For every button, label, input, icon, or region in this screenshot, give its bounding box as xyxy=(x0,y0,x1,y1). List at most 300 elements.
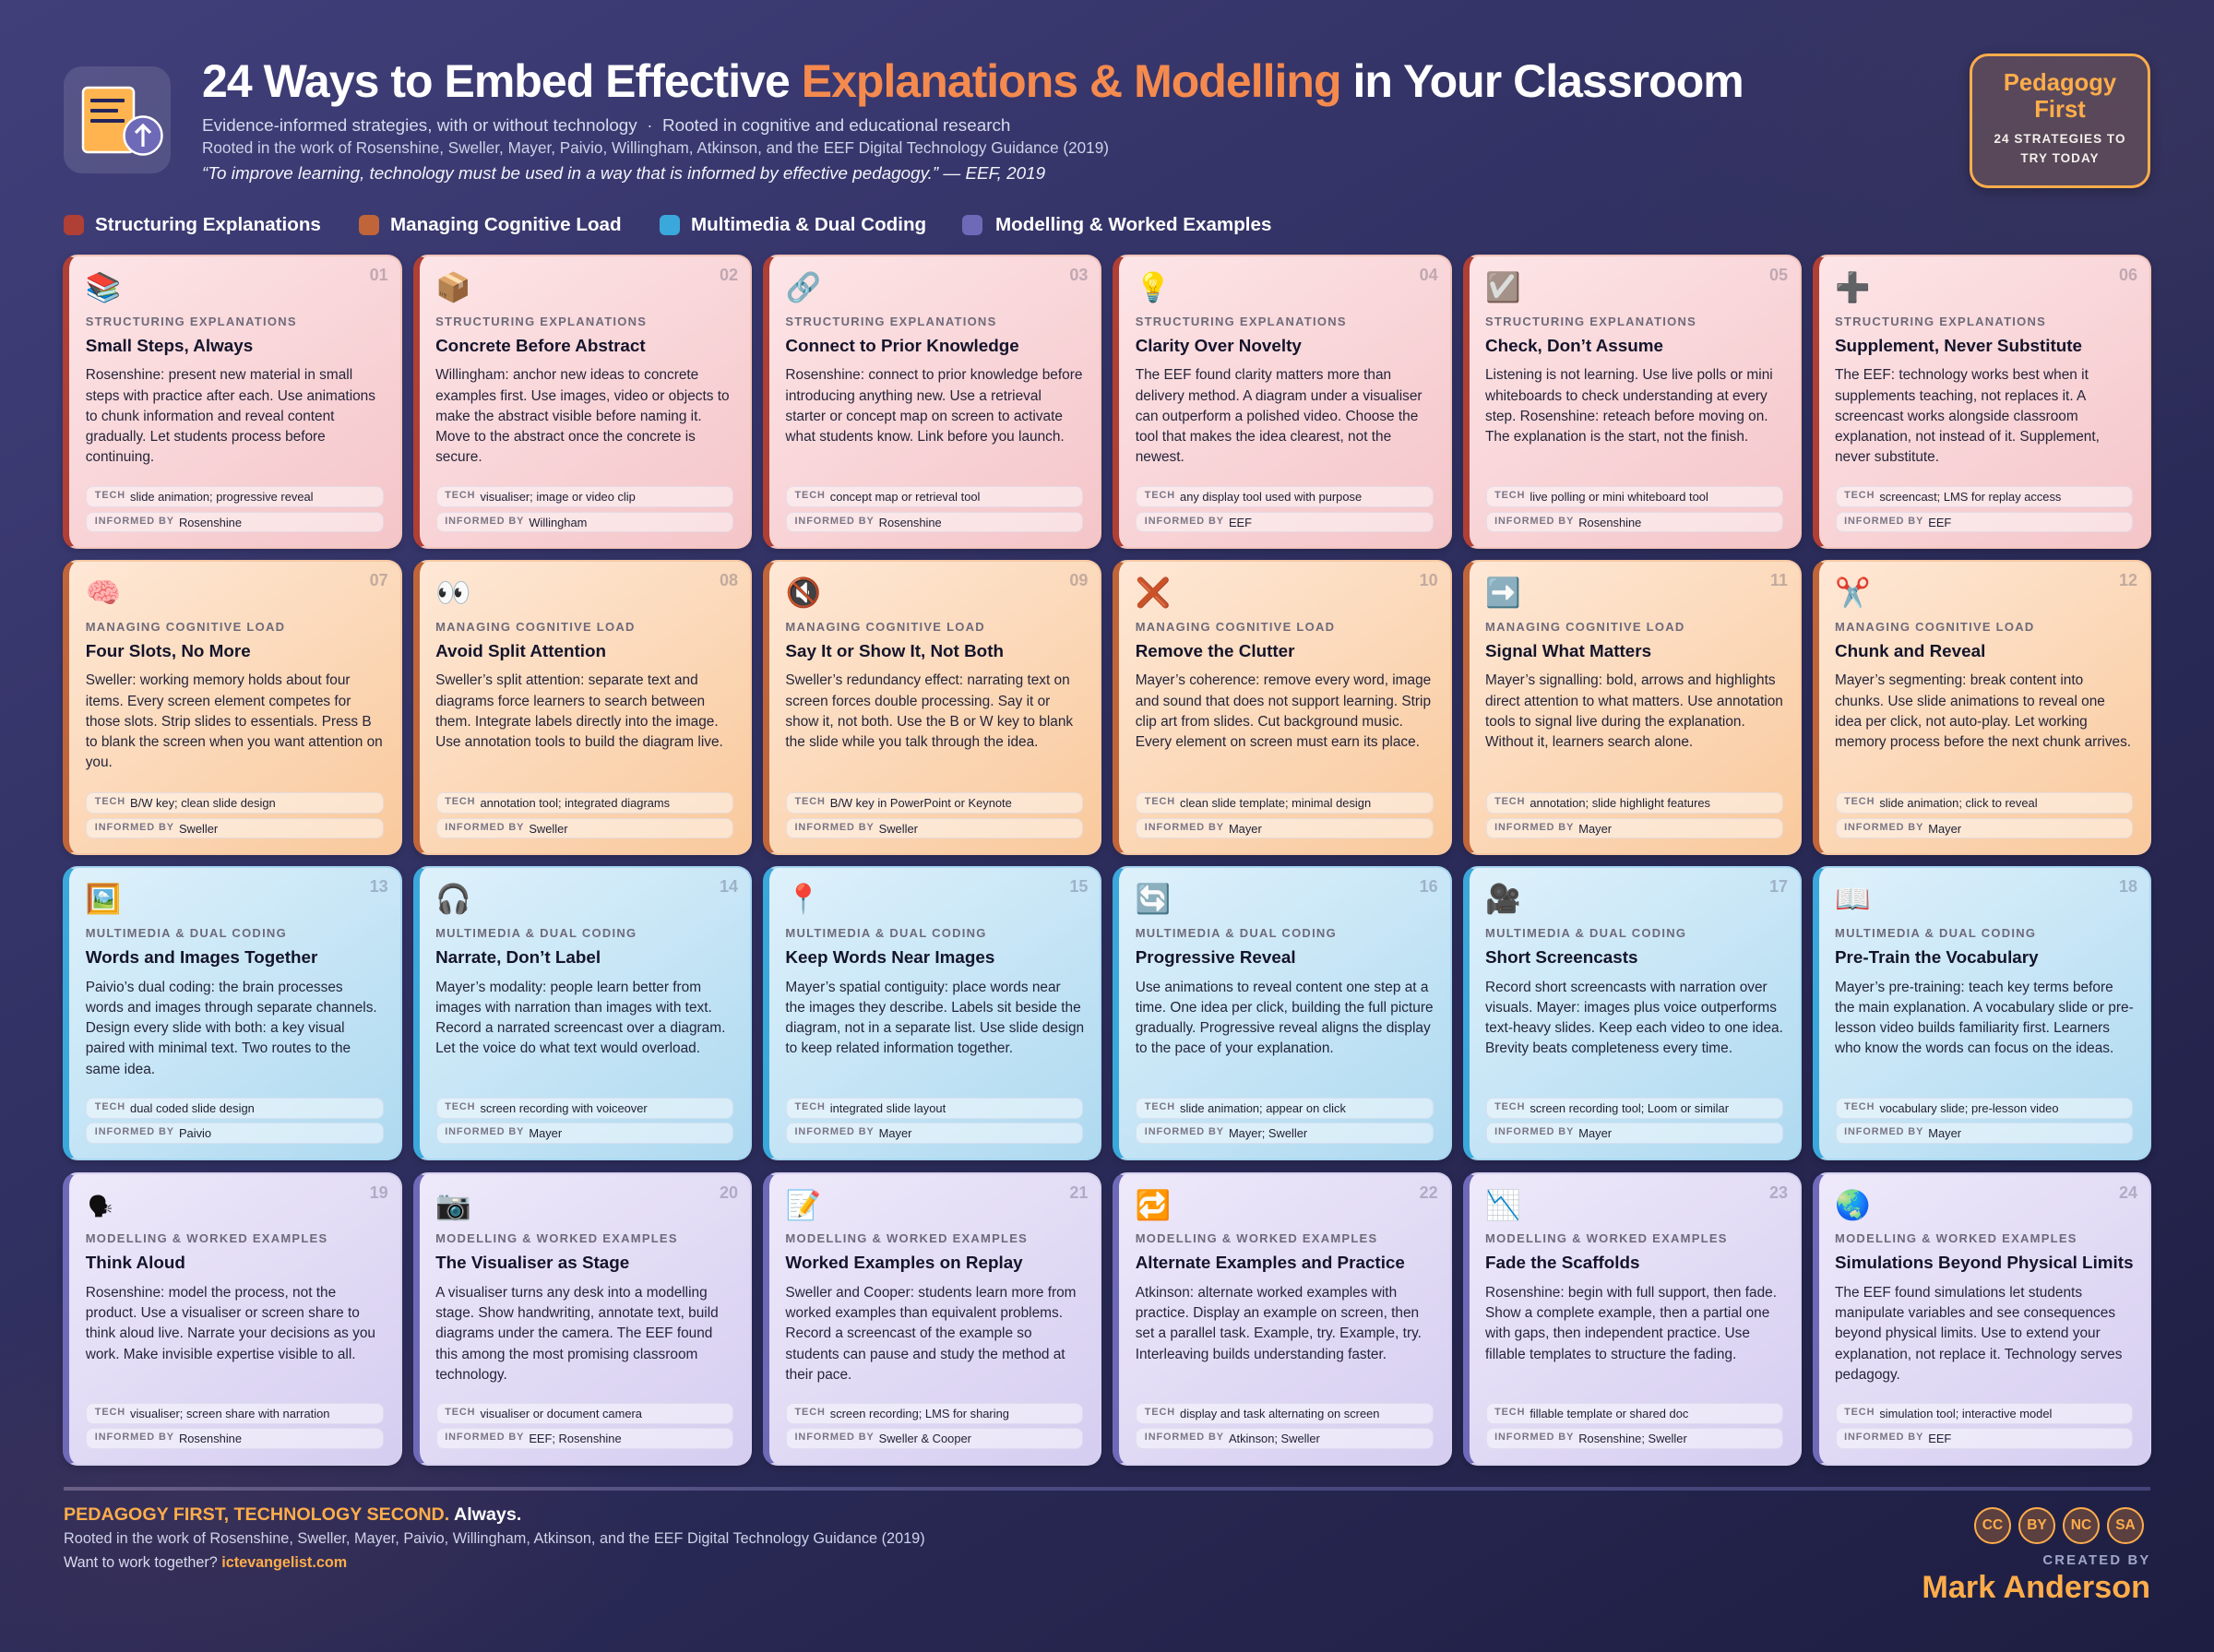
card 17: Mayer xyxy=(1578,1126,1612,1140)
card 11: 11 xyxy=(1770,571,1788,589)
card 20: visualiser or document camera xyxy=(480,1407,642,1420)
card 02: Move to the abstract once the concrete is xyxy=(435,429,696,445)
card 18: MULTIMEDIA & DUAL CODING xyxy=(1835,926,2036,940)
card 09 xyxy=(763,560,1101,855)
card 06: Supplement, Never Substitute xyxy=(1835,336,2082,354)
card 21: students can pause and study the method at xyxy=(785,1347,1065,1362)
card 13: 13 xyxy=(370,877,388,896)
card 23: fillable templates to structure the fading. xyxy=(1485,1347,1736,1362)
card 04 xyxy=(1113,255,1452,549)
licence badges: BY xyxy=(2027,1517,2047,1533)
card 10 xyxy=(1113,560,1452,855)
card 06: ➕ xyxy=(1835,270,1871,304)
card 19: think aloud live. Narrate your decisions as you xyxy=(86,1325,375,1341)
card 14: Let the voice do what text would overload. xyxy=(435,1040,700,1056)
card 22: INFORMED BY xyxy=(1145,1432,1224,1443)
card 04: tool that makes the idea clearest, not the xyxy=(1136,429,1391,445)
card 04: can outperform a polished video. Choose the xyxy=(1136,409,1418,424)
card 09: TECH xyxy=(795,796,826,807)
card 12: TECH xyxy=(1844,796,1875,807)
card 20: TECH xyxy=(445,1407,475,1418)
card 13: Paivio’s dual coding: the brain processes xyxy=(86,980,343,995)
header icon xyxy=(64,66,171,173)
card 09: screen forces double processing. Say it or xyxy=(785,694,1050,709)
card 07 xyxy=(63,560,402,855)
card 22 xyxy=(1113,1171,1452,1465)
card 12: Mayer’s segmenting: break content into xyxy=(1835,672,2083,688)
card 20 xyxy=(413,1171,752,1465)
card 12: idea per click, not auto-play. Let working xyxy=(1835,714,2088,730)
card 24: 24 xyxy=(2119,1183,2137,1201)
card 01: 01 xyxy=(370,266,388,284)
card 12 xyxy=(1813,560,2151,855)
card 23: INFORMED BY xyxy=(1494,1432,1574,1443)
card 02: visualiser; image or video clip xyxy=(480,490,636,504)
card 18: 📖 xyxy=(1835,882,1871,916)
card 06: 06 xyxy=(2119,266,2137,284)
card 01: Small Steps, Always xyxy=(86,336,253,354)
card 08: 08 xyxy=(720,571,738,589)
card 17: Short Screencasts xyxy=(1485,947,1637,967)
card 07: 07 xyxy=(370,571,388,589)
card 16: INFORMED BY xyxy=(1145,1126,1224,1137)
card 07: TECH xyxy=(95,796,125,807)
card 02: Concrete Before Abstract xyxy=(435,336,646,354)
card 15: to keep related information together. xyxy=(785,1040,1013,1056)
card 12: Chunk and Reveal xyxy=(1835,640,1985,660)
card 20: 📷 xyxy=(435,1188,471,1221)
card 18: TECH xyxy=(1844,1101,1875,1112)
card 01: STRUCTURING EXPLANATIONS xyxy=(86,314,297,328)
card 06: The EEF: technology works best when it xyxy=(1835,367,2089,383)
card 22: Interleaving builds understanding faster. xyxy=(1136,1347,1387,1362)
card 23: fillable template or shared doc xyxy=(1530,1407,1688,1420)
card 19: 19 xyxy=(370,1183,388,1201)
card 21: Record a screencast of the example so xyxy=(785,1325,1032,1341)
card 05: live polling or mini whiteboard tool xyxy=(1530,490,1708,504)
card 02: STRUCTURING EXPLANATIONS xyxy=(435,314,647,328)
creator credit: CREATED BY xyxy=(2042,1553,2151,1568)
card 08: INFORMED BY xyxy=(445,822,524,833)
card 20: stage. Show handwriting, annotate text, build xyxy=(435,1305,719,1321)
card 01: steps with practice after each. Use animations xyxy=(86,388,375,404)
card 21: Sweller and Cooper: students learn more from xyxy=(785,1285,1077,1301)
badge: TRY TODAY xyxy=(2020,151,2100,164)
card 21: Worked Examples on Replay xyxy=(785,1253,1023,1272)
card 02: examples first. Use images, video or objects to xyxy=(435,388,730,404)
card 04: 💡 xyxy=(1136,270,1171,304)
card 17: 🎥 xyxy=(1485,882,1521,916)
card 08: Use annotation tools to build the diagram live. xyxy=(435,734,723,750)
quote: “To improve learning, technology must be used in a way that is informed by effective pedagogy.” — EEF, 2019 xyxy=(202,162,1045,183)
card 07: INFORMED BY xyxy=(95,822,174,833)
card 12: MANAGING COGNITIVE LOAD xyxy=(1835,620,2035,633)
card 07: Four Slots, No More xyxy=(86,640,251,660)
card 09: Sweller’s redundancy effect: narrating text on xyxy=(785,672,1070,688)
card 15: Keep Words Near Images xyxy=(785,947,994,967)
card 03: introducing anything new. Use a retrieval xyxy=(785,388,1042,404)
card 14: TECH xyxy=(445,1101,475,1112)
card 23: 📉 xyxy=(1485,1188,1521,1221)
card 04: delivery method. A diagram under a visualiser xyxy=(1136,388,1422,404)
card 10: clip art from slides. Cut background music. xyxy=(1136,714,1403,730)
card 19: INFORMED BY xyxy=(95,1432,174,1443)
card 24: 🌏 xyxy=(1835,1188,1871,1221)
card 11: Mayer xyxy=(1578,822,1612,836)
card 18: Mayer’s pre-training: teach key terms before xyxy=(1835,980,2113,995)
card 20: INFORMED BY xyxy=(445,1432,524,1443)
card 13: INFORMED BY xyxy=(95,1126,174,1137)
card 07: MANAGING COGNITIVE LOAD xyxy=(86,620,285,633)
card 03: concept map or retrieval tool xyxy=(830,490,980,504)
card 11: Mayer’s signalling: bold, arrows and highlights xyxy=(1485,672,1776,688)
card 02 xyxy=(413,255,752,549)
card 01: Rosenshine: present new material in small xyxy=(86,367,352,383)
card 13: 🖼️ xyxy=(86,882,121,916)
card 15: Mayer xyxy=(879,1126,911,1140)
card 24: beyond physical limits. Use to extend your xyxy=(1835,1325,2101,1341)
card 07: Sweller: working memory holds about four xyxy=(86,672,351,688)
card 21: 📝 xyxy=(786,1188,821,1221)
card 01: slide animation; progressive reveal xyxy=(130,490,314,504)
card 16: to the pace of your explanation. xyxy=(1136,1040,1334,1056)
card 02: 📦 xyxy=(435,270,471,304)
card 09: show it, not both. Use the B or W key to blank xyxy=(785,714,1073,730)
card 08: Sweller xyxy=(529,822,568,836)
card 23: Show a complete example, then a partial one xyxy=(1485,1305,1769,1321)
badge xyxy=(1970,53,2150,188)
card 09: the slide while you talk through the idea. xyxy=(785,734,1038,750)
card 05: step. Rosenshine: reteach before moving on. xyxy=(1485,409,1768,424)
card 16: 16 xyxy=(1420,877,1438,896)
card 20: MODELLING & WORKED EXAMPLES xyxy=(435,1231,678,1245)
card 01 xyxy=(63,255,402,549)
card 01: gradually. Let students process before xyxy=(86,429,326,445)
card 01: TECH xyxy=(95,490,125,501)
subtitle: Evidence-informed strategies, with or without technology · Rooted in cognitive and educational research xyxy=(202,115,1010,135)
card 21 xyxy=(763,1171,1101,1465)
card 12: slide animation; click to reveal xyxy=(1879,796,2038,810)
card 24 xyxy=(1813,1171,2151,1465)
card 03: STRUCTURING EXPLANATIONS xyxy=(785,314,996,328)
card 01: Rosenshine xyxy=(179,516,242,529)
card 23: 23 xyxy=(1769,1183,1788,1201)
card 16: 🔄 xyxy=(1136,882,1171,916)
card 05: INFORMED BY xyxy=(1494,516,1574,527)
card 20: diagrams under the camera. The EEF found xyxy=(435,1325,712,1341)
card 08: them. Integrate labels directly into the image. xyxy=(435,714,719,730)
card 05: Check, Don’t Assume xyxy=(1485,336,1663,354)
card 19: work. Make invisible expertise visible to all. xyxy=(86,1347,356,1362)
card 03: 03 xyxy=(1069,266,1088,284)
licence badges xyxy=(1974,1507,2144,1544)
card 18: Pre-Train the Vocabulary xyxy=(1835,947,2039,967)
card 11: annotation; slide highlight features xyxy=(1530,796,1710,810)
card 22: Alternate Examples and Practice xyxy=(1136,1253,1405,1272)
card 06: supplements teaching, not replaces it. A xyxy=(1835,388,2086,404)
card 15 xyxy=(763,866,1101,1160)
footer text: Rooted in the work of Rosenshine, Sweller, Mayer, Paivio, Willingham, Atkinson, and the EEF Digital Technology Guidance (2019) xyxy=(64,1529,925,1546)
card 15: Mayer’s spatial contiguity: place words near xyxy=(785,980,1061,995)
card 22: display and task alternating on screen xyxy=(1180,1407,1379,1420)
card 11: MANAGING COGNITIVE LOAD xyxy=(1485,620,1685,633)
legend: Modelling & Worked Examples xyxy=(995,214,1271,235)
card 13: paired with minimal text. Two routes to the xyxy=(86,1040,351,1056)
footer text: PEDAGOGY FIRST, TECHNOLOGY SECOND. Always. xyxy=(64,1504,521,1525)
card 21: 21 xyxy=(1069,1183,1088,1201)
card 23: with gaps, then independent practice. Use xyxy=(1485,1325,1750,1341)
card 07: 🧠 xyxy=(86,576,121,610)
card 23: Rosenshine: begin with full support, then fade. xyxy=(1485,1285,1777,1301)
card 19: Think Aloud xyxy=(86,1253,185,1272)
card 11: direct attention to what matters. Use annotation xyxy=(1485,694,1783,709)
card 20: technology. xyxy=(435,1367,507,1383)
card 10: Mayer xyxy=(1229,822,1262,836)
card 05: TECH xyxy=(1494,490,1525,501)
card 13: Words and Images Together xyxy=(86,947,317,967)
card 06: INFORMED BY xyxy=(1844,516,1923,527)
card 08: diagrams force learners to search between xyxy=(435,694,705,709)
card 21: INFORMED BY xyxy=(795,1432,875,1443)
card 05: STRUCTURING EXPLANATIONS xyxy=(1485,314,1696,328)
card 06: explanation, not instead of it. Supplement, xyxy=(1835,429,2100,445)
card 22: Atkinson: alternate worked examples with xyxy=(1136,1285,1397,1301)
card 22: MODELLING & WORKED EXAMPLES xyxy=(1136,1231,1377,1245)
card 23: Rosenshine; Sweller xyxy=(1578,1432,1687,1445)
card 18: Mayer xyxy=(1928,1126,1961,1140)
card 22: 22 xyxy=(1420,1183,1438,1201)
card 02: 02 xyxy=(720,266,738,284)
card 15: MULTIMEDIA & DUAL CODING xyxy=(785,926,987,940)
card 21: Sweller & Cooper xyxy=(879,1432,971,1445)
card 10: Remove the Clutter xyxy=(1136,640,1294,660)
card 09: 09 xyxy=(1069,571,1088,589)
card 04: The EEF found clarity matters more than xyxy=(1136,367,1391,383)
card 10: INFORMED BY xyxy=(1145,822,1224,833)
card 02: Willingham xyxy=(529,516,587,529)
card 08: 👀 xyxy=(435,576,471,610)
card 14: screen recording with voiceover xyxy=(480,1101,648,1115)
card 21: worked examples than equivalent problems. xyxy=(785,1305,1063,1321)
card 06: never substitute. xyxy=(1835,449,1939,465)
footer text xyxy=(64,1504,925,1570)
card 13 xyxy=(63,866,402,1160)
card 17: Brevity beats completeness every time. xyxy=(1485,1040,1732,1056)
card 24: pedagogy. xyxy=(1835,1367,1900,1383)
card 04: EEF xyxy=(1229,516,1252,529)
card 19: Rosenshine: model the process, not the xyxy=(86,1285,336,1301)
card 16: slide animation; appear on click xyxy=(1180,1101,1346,1115)
card 08: TECH xyxy=(445,796,475,807)
card 06: TECH xyxy=(1844,490,1875,501)
card 12: INFORMED BY xyxy=(1844,822,1923,833)
card 24: explanation, not replace it. Technology serves xyxy=(1835,1347,2122,1362)
card 07: to blank the screen when you want attention on xyxy=(86,734,383,750)
card 03: what students know. Link before you launch. xyxy=(785,429,1065,445)
card 11: Without it, learners search alone. xyxy=(1485,734,1693,750)
card 04: Clarity Over Novelty xyxy=(1136,336,1302,354)
card 20: A visualiser turns any desk into a modelling xyxy=(435,1285,708,1301)
card 06 xyxy=(1813,255,2151,549)
card 18: lesson video builds familiarity first. Learners xyxy=(1835,1020,2110,1036)
card 22: set a parallel task. Example, try. Example, try. xyxy=(1136,1325,1422,1341)
card 17: text-heavy slides. Keep each video to one idea. xyxy=(1485,1020,1783,1036)
card 17: 17 xyxy=(1769,877,1788,896)
title: 24 Ways to Embed Effective Explanations & Modelling in Your Classroom xyxy=(202,55,1744,107)
card 08: annotation tool; integrated diagrams xyxy=(480,796,670,810)
card 05: ☑️ xyxy=(1485,270,1521,304)
card 19: MODELLING & WORKED EXAMPLES xyxy=(86,1231,327,1245)
card 12: memory process before the next chunk arrives. xyxy=(1835,734,2131,750)
legend: Multimedia & Dual Coding xyxy=(691,214,926,235)
card 03 xyxy=(763,255,1101,549)
card 22: 🔁 xyxy=(1136,1188,1171,1221)
card 09: B/W key in PowerPoint or Keynote xyxy=(830,796,1012,810)
card 13: TECH xyxy=(95,1101,125,1112)
card 07: B/W key; clean slide design xyxy=(130,796,276,810)
card 23: TECH xyxy=(1494,1407,1525,1418)
card 03: TECH xyxy=(795,490,826,501)
card 03: Connect to Prior Knowledge xyxy=(785,336,1019,354)
card 19 xyxy=(63,1171,402,1465)
card 18: vocabulary slide; pre-lesson video xyxy=(1879,1101,2059,1115)
legend xyxy=(64,214,1271,235)
card 04: STRUCTURING EXPLANATIONS xyxy=(1136,314,1347,328)
card 11 xyxy=(1463,560,1802,855)
card 20: The Visualiser as Stage xyxy=(435,1253,629,1272)
card 09: INFORMED BY xyxy=(795,822,875,833)
card 21: TECH xyxy=(795,1407,826,1418)
card 23 xyxy=(1463,1171,1802,1465)
card 13: words and images through separate channels. xyxy=(86,1000,377,1016)
card 06: EEF xyxy=(1928,516,1951,529)
card 08: Sweller’s split attention: separate text and xyxy=(435,672,698,688)
card 15: INFORMED BY xyxy=(795,1126,875,1137)
card 19: Rosenshine xyxy=(179,1432,242,1445)
card 24: simulation tool; interactive model xyxy=(1879,1407,2052,1420)
card 15: integrated slide layout xyxy=(830,1101,946,1115)
licence badges: SA xyxy=(2115,1517,2136,1533)
card 16: Progressive Reveal xyxy=(1136,947,1296,967)
card 10: Mayer’s coherence: remove every word, image xyxy=(1136,672,1431,688)
badge: First xyxy=(2034,97,2086,123)
card 09: MANAGING COGNITIVE LOAD xyxy=(785,620,985,633)
card 17: MULTIMEDIA & DUAL CODING xyxy=(1485,926,1686,940)
card 24: MODELLING & WORKED EXAMPLES xyxy=(1835,1231,2077,1245)
card 14: Narrate, Don’t Label xyxy=(435,947,601,967)
card 15: diagram, not in a separate list. Use slide design xyxy=(785,1020,1084,1036)
card 14: Mayer’s modality: people learn better from xyxy=(435,980,701,995)
card 12: chunks. Use slide animations to reveal one xyxy=(1835,694,2105,709)
card 12: Mayer xyxy=(1928,822,1961,836)
card 03: Rosenshine: connect to prior knowledge before xyxy=(785,367,1082,383)
card 18: who know the words can focus on the ideas. xyxy=(1835,1040,2113,1056)
card 15: 15 xyxy=(1069,877,1088,896)
card 15: TECH xyxy=(795,1101,826,1112)
card 10: 10 xyxy=(1420,571,1438,589)
card 04: newest. xyxy=(1136,449,1184,465)
card 06: STRUCTURING EXPLANATIONS xyxy=(1835,314,2046,328)
card 10: MANAGING COGNITIVE LOAD xyxy=(1136,620,1335,633)
card 11: ➡️ xyxy=(1485,576,1521,610)
card 19: visualiser; screen share with narration xyxy=(130,1407,329,1420)
badge: 24 STRATEGIES TO xyxy=(1994,132,2126,146)
card 02: Willingham: anchor new ideas to concrete xyxy=(435,367,698,383)
card 11: tools to signal live during the explanation. xyxy=(1485,714,1745,730)
card 02: secure. xyxy=(435,449,482,465)
card 02: INFORMED BY xyxy=(445,516,524,527)
licence badges: CC xyxy=(1982,1517,2003,1533)
card 22: TECH xyxy=(1145,1407,1175,1418)
badge: Pedagogy xyxy=(2004,70,2116,96)
card 09: Say It or Show It, Not Both xyxy=(785,640,1004,660)
card 06: screencast; LMS for replay access xyxy=(1879,490,2061,504)
card 10: clean slide template; minimal design xyxy=(1180,796,1371,810)
card 03: Rosenshine xyxy=(879,516,942,529)
card 05: Rosenshine xyxy=(1578,516,1641,529)
card 10: TECH xyxy=(1145,796,1175,807)
card 05 xyxy=(1463,255,1802,549)
card 24: The EEF found simulations let students xyxy=(1835,1285,2082,1301)
card 11: Signal What Matters xyxy=(1485,640,1651,660)
card 10: Every element on screen must earn its place. xyxy=(1136,734,1420,750)
card 16 xyxy=(1113,866,1452,1160)
card 04: INFORMED BY xyxy=(1145,516,1224,527)
card 14: images with narration than images with text. xyxy=(435,1000,712,1016)
card 18: 18 xyxy=(2119,877,2137,896)
card 24: INFORMED BY xyxy=(1844,1432,1923,1443)
card 02: make the abstract visible before naming it. xyxy=(435,409,702,424)
card 12: ✂️ xyxy=(1835,576,1871,610)
card 17: visuals. Mayer: images plus voice outperforms xyxy=(1485,1000,1777,1016)
card 02: TECH xyxy=(445,490,475,501)
card 14 xyxy=(413,866,752,1160)
card 22: Atkinson; Sweller xyxy=(1229,1432,1320,1445)
card 08: MANAGING COGNITIVE LOAD xyxy=(435,620,636,633)
card 21: their pace. xyxy=(785,1367,851,1383)
card 21: MODELLING & WORKED EXAMPLES xyxy=(785,1231,1028,1245)
card 17 xyxy=(1463,866,1802,1160)
card 07: items. Every screen element competes for xyxy=(86,694,351,709)
card 13: Paivio xyxy=(179,1126,211,1140)
card 24: EEF xyxy=(1928,1432,1951,1445)
card 09: 🔇 xyxy=(786,576,821,610)
card 18: INFORMED BY xyxy=(1844,1126,1923,1137)
card 14: Mayer xyxy=(529,1126,562,1140)
licence badges: NC xyxy=(2071,1517,2091,1533)
legend: Structuring Explanations xyxy=(95,214,321,235)
card 24: TECH xyxy=(1844,1407,1875,1418)
card 19: product. Use a visualiser or screen share to xyxy=(86,1305,360,1321)
card 04: 04 xyxy=(1420,266,1438,284)
card 11: TECH xyxy=(1494,796,1525,807)
card 18: the main explanation. A vocabulary slide or pre- xyxy=(1835,1000,2134,1016)
card 19: TECH xyxy=(95,1407,125,1418)
card 20: this among the most promising classroom xyxy=(435,1347,697,1362)
card 15: the images they describe. Labels sit beside the xyxy=(785,1000,1081,1016)
card 14: 🎧 xyxy=(435,882,471,916)
card 05: The explanation is the start, not the finish. xyxy=(1485,429,1748,445)
card 12: 12 xyxy=(2119,571,2137,589)
card 16: Use animations to reveal content one step at a xyxy=(1136,980,1428,995)
card 16: TECH xyxy=(1145,1101,1175,1112)
card 16: Mayer; Sweller xyxy=(1229,1126,1307,1140)
card 19: 🗣️ xyxy=(88,1195,113,1218)
card 14: INFORMED BY xyxy=(445,1126,524,1137)
card 13: same idea. xyxy=(86,1062,155,1077)
card 01: INFORMED BY xyxy=(95,516,174,527)
card 05: 05 xyxy=(1769,266,1788,284)
